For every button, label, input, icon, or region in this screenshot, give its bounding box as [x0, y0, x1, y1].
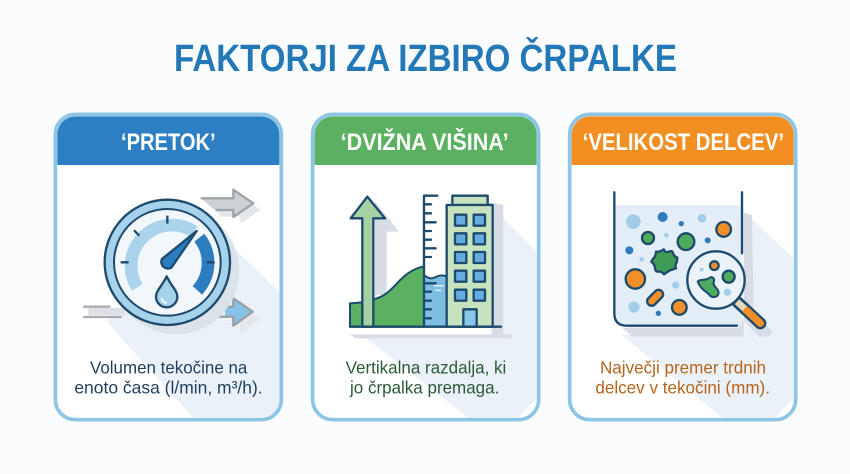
- icon: gauge: [105, 200, 239, 334]
- icon shadows: [350, 202, 512, 338]
- panel: velikost delcev: [570, 114, 796, 420]
- panel: pretok: [55, 114, 281, 420]
- description: velikost delcev line 2: delcev v tekočini (mm).: [595, 377, 770, 397]
- description: pretok units: enoto časa (l/min, m³/h).: [74, 377, 263, 397]
- header: dvižna višina: ‘DVIŽNA VIŠINA’: [341, 128, 509, 156]
- icon: flow arrow bottom: [213, 298, 261, 333]
- header: velikost delcev: [572, 116, 794, 165]
- header: pretok: ‘PRETOK’: [121, 130, 216, 156]
- icon: hill: [350, 266, 424, 327]
- icon: flow arrow top: [201, 190, 261, 223]
- icon: water: [424, 275, 447, 327]
- building long shadow: [362, 218, 537, 418]
- header: pretok: [57, 116, 279, 165]
- water drop: [156, 276, 177, 307]
- header: velikost delcev: ‘VELIKOST DELCEV’: [583, 130, 784, 156]
- title: FAKTORJI ZA IZBIRO ČRPALKE: [174, 35, 677, 80]
- header: dvižna višina: [315, 116, 537, 165]
- icon: motion lines: [83, 307, 125, 317]
- ground line: [350, 323, 501, 330]
- icon: up arrow: [351, 197, 385, 327]
- panel: dvižna višina: [313, 114, 539, 420]
- icon: beaker: [614, 192, 773, 337]
- beaker long shadow: [622, 212, 794, 418]
- gauge ticks: [121, 216, 215, 262]
- icon: ruler: [424, 196, 437, 327]
- gauge scale arc: [131, 225, 194, 287]
- description: dvižna višina: Vertikalna razdalja, ki: [346, 357, 506, 377]
- description: velikost delcev: Največji premer trdnih: [600, 357, 766, 377]
- icon: building: [447, 196, 493, 327]
- gauge needle: [161, 231, 197, 269]
- gauge high range arc: [197, 238, 208, 290]
- gauge long shadow: [107, 250, 280, 418]
- icon: magnifier: [687, 251, 760, 323]
- particles: [625, 212, 731, 316]
- description: dvižna višina line 2: jo črpalka premaga.: [349, 377, 499, 397]
- description: pretok: Volumen tekočine na: [90, 357, 247, 377]
